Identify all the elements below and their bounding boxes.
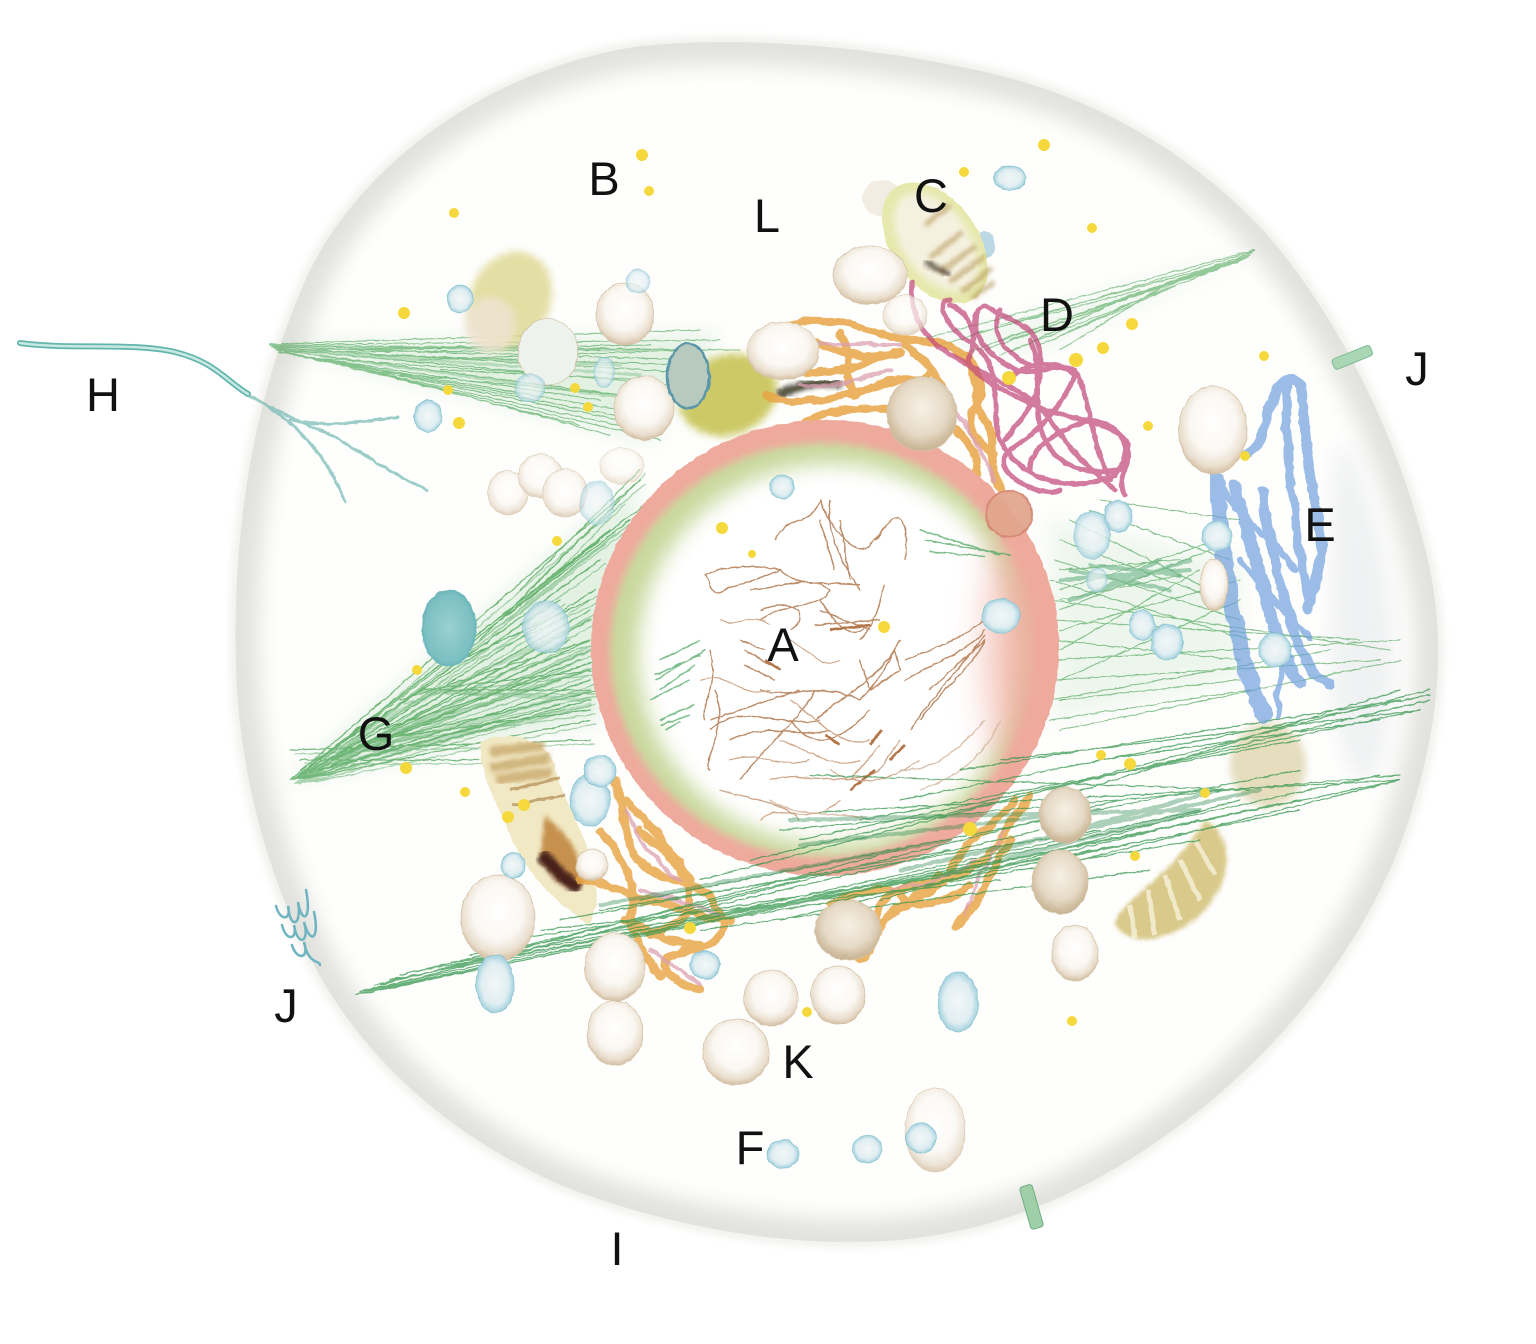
vesicle: teal tan centre [667,344,709,408]
label A: A [767,618,799,671]
vesicle: teal large [422,590,476,666]
nucleus [591,420,1110,876]
vesicle group: blue [414,166,1291,1168]
flagellum with roots: H [20,343,427,502]
filament bundle: left fan [290,470,655,784]
endoplasmic reticulum: lower right [830,795,1030,958]
endoplasmic reticulum: lower left [580,780,730,990]
nuclear green streaks [650,530,1010,730]
nuclear envelope [591,420,1110,876]
label D: D [1040,288,1074,341]
membrane channel: bottom [1019,1184,1044,1230]
vesicle group: tan spheres [461,246,1247,1172]
label E: E [1304,498,1336,551]
label B: B [588,152,620,205]
label L: L [754,189,780,242]
mitochondrion: olive centre top [667,340,842,450]
label K: K [782,1035,814,1088]
label H: H [86,368,120,421]
label C: C [914,169,948,222]
label J right: J [1405,342,1429,395]
membrane channel: upper right [1331,345,1373,370]
mitochondrion: C [860,163,1010,323]
letter labels [86,152,1429,1275]
small yellow particles [398,139,1269,1026]
label J left: J [274,979,298,1032]
filament bundle: upper right [920,250,1255,355]
mitochondrion: lower left [480,736,596,925]
mitochondrion: faint right [1230,723,1306,807]
vesicles [414,166,1291,1172]
endoplasmic reticulum: upper [765,321,1002,490]
filament bundle: right of nucleus [1050,500,1400,730]
mitochondrion: olive upper left [453,238,567,362]
golgi apparatus: D [912,282,1129,495]
cytoskeleton filaments behind organelles [270,250,1400,784]
cytoskeleton filaments: bottom long bundle [355,690,1430,995]
label I: I [610,1222,624,1275]
membrane junction: left [276,890,320,965]
chromatin [700,500,1000,820]
filament bundle: upper left [270,330,740,440]
filament haze [275,250,1255,780]
lysosome cluster: E [1216,379,1330,715]
label F: F [736,1121,764,1174]
cell membrane body [235,42,1438,1242]
mitochondrion: crescent right [1115,820,1227,939]
label G: G [358,707,394,760]
